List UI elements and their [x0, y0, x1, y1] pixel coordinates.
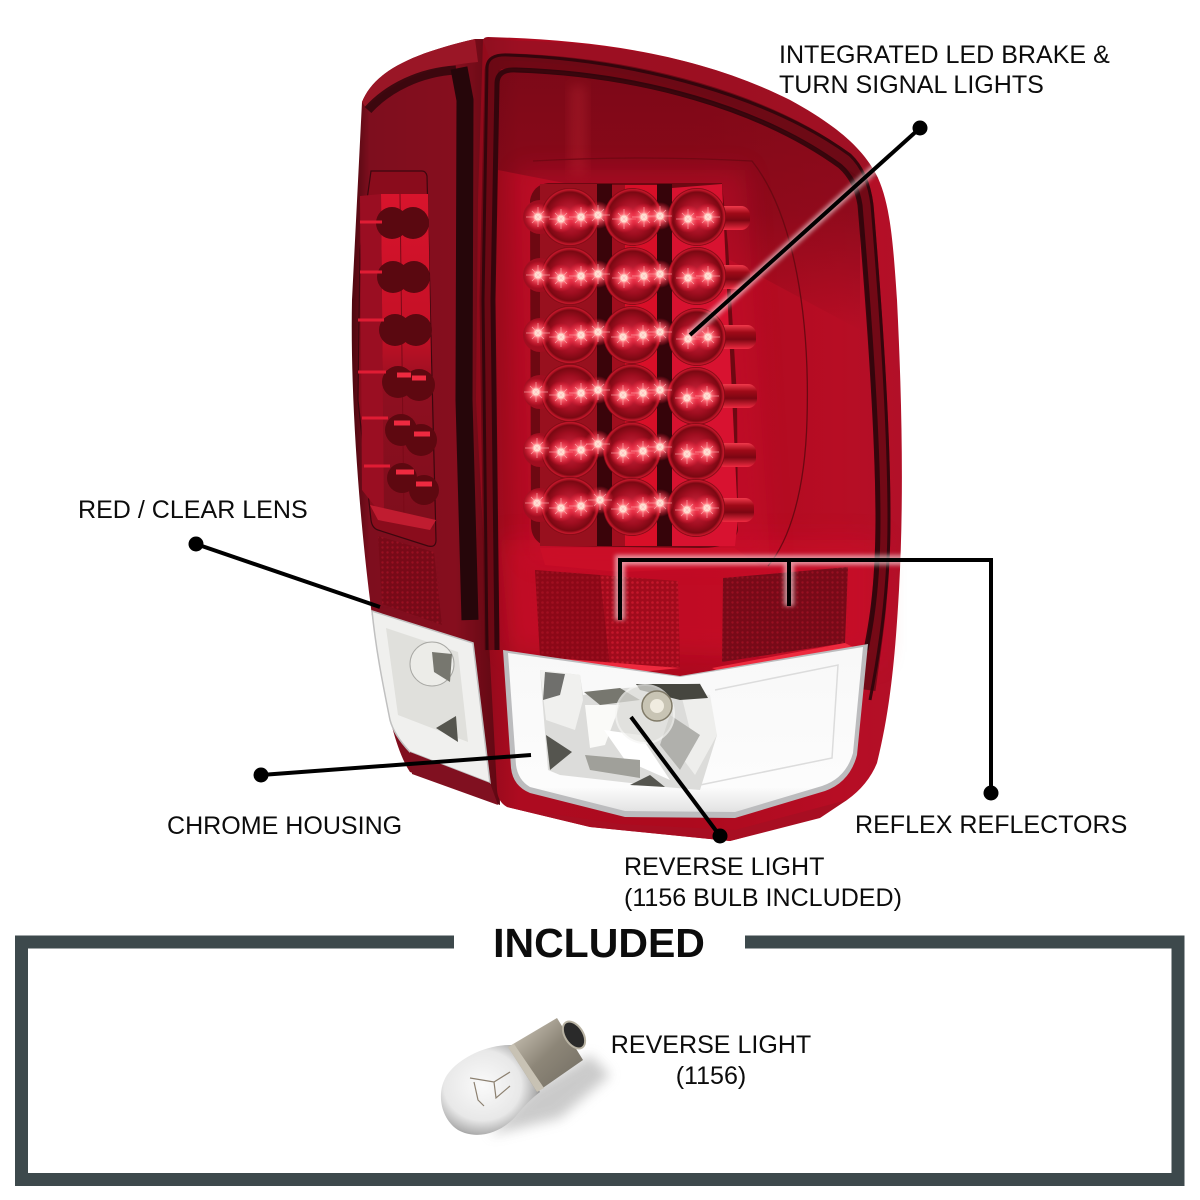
callout: reverse light: [624, 717, 902, 912]
base collar: [508, 1044, 544, 1092]
left tail light: [352, 39, 500, 805]
filament: [470, 1072, 510, 1106]
lower body brightening: [500, 540, 880, 660]
left lamp bulb details: [432, 652, 452, 682]
panel frame: [22, 942, 1178, 1180]
bracket line: [620, 560, 991, 793]
reflector bowl: [540, 670, 717, 790]
left lamp chrome housing: [372, 611, 490, 783]
reverse bulb: [616, 685, 674, 743]
heading: INCLUDED: [493, 920, 705, 966]
dot: [912, 120, 928, 136]
left lamp body: [352, 39, 500, 805]
left lamp bottom edge: [410, 752, 498, 805]
label: REVERSE LIGHT: [624, 853, 824, 881]
base: [508, 1018, 583, 1092]
dot: [188, 536, 204, 552]
left lamp reflector: [378, 536, 442, 625]
label line two: TURN SIGNAL LIGHTS: [779, 71, 1044, 99]
bulb shadow: [490, 1055, 610, 1135]
LED panel background: [530, 183, 738, 548]
chrome inner rectangle: [700, 665, 838, 785]
dark trim band outer: [483, 55, 889, 700]
left lamp LED recess: [358, 171, 436, 546]
LED lens surround: [533, 158, 807, 566]
icon: bulb: [441, 1018, 610, 1135]
LED lens glow: [520, 170, 770, 560]
top rim tint: [483, 40, 878, 180]
callout: red clear lens: [78, 496, 380, 607]
base tip: [558, 1018, 590, 1052]
bright streak at reflector base: [540, 643, 855, 672]
reflector left: [535, 570, 680, 668]
dot: [712, 828, 728, 844]
LED isolated lit points: [522, 201, 674, 517]
line glow: [690, 128, 920, 335]
right lamp body: [476, 37, 902, 841]
bright strips: [540, 184, 738, 546]
label: RED / CLEAR LENS: [78, 496, 308, 524]
bulb label: REVERSE LIGHT: [611, 1031, 811, 1059]
leader line: [631, 717, 720, 836]
label: REFLEX REFLECTORS: [855, 811, 1127, 839]
leader line: [261, 755, 531, 775]
leader line: [196, 544, 380, 607]
LED bulb array: [522, 188, 757, 537]
dark trim band underlay: [487, 61, 883, 690]
vertical highlight: [570, 85, 586, 175]
glass: [441, 1045, 540, 1135]
reflector left shading: [535, 570, 610, 668]
callout: chrome housing: [167, 755, 531, 840]
panel: included: [22, 920, 1178, 1180]
right tail light: [476, 37, 902, 841]
dot: [984, 786, 998, 800]
chrome outer rim: [503, 644, 868, 818]
left lamp dark band: [459, 68, 470, 620]
upper dark tint: [498, 70, 860, 330]
label line two: (1156 BULB INCLUDED): [624, 884, 902, 912]
LED stems: [716, 206, 757, 522]
dark trim band inner: [493, 70, 878, 650]
leader line: [690, 128, 920, 335]
callout: reflex reflectors: [620, 560, 1127, 839]
LED left partial column: [523, 200, 557, 522]
left lamp dark trim top: [368, 70, 456, 110]
bulb label line two: (1156): [676, 1062, 746, 1090]
left lamp bowl: [386, 628, 468, 742]
label: INTEGRATED LED BRAKE &: [779, 41, 1110, 69]
left lamp top rim: [362, 39, 478, 108]
label: CHROME HOUSING: [167, 812, 402, 840]
dot: [254, 768, 268, 782]
bottom red lip: [507, 800, 847, 841]
callout: integrated LED brake and turn signal lights: [690, 41, 1110, 335]
reflector right: [722, 567, 848, 662]
chrome housing face: [508, 647, 863, 812]
left lamp LED strips: [358, 194, 439, 530]
lens bottom glow: [540, 548, 760, 572]
left lamp bulb: [410, 642, 454, 686]
bracket glow: [620, 560, 991, 793]
